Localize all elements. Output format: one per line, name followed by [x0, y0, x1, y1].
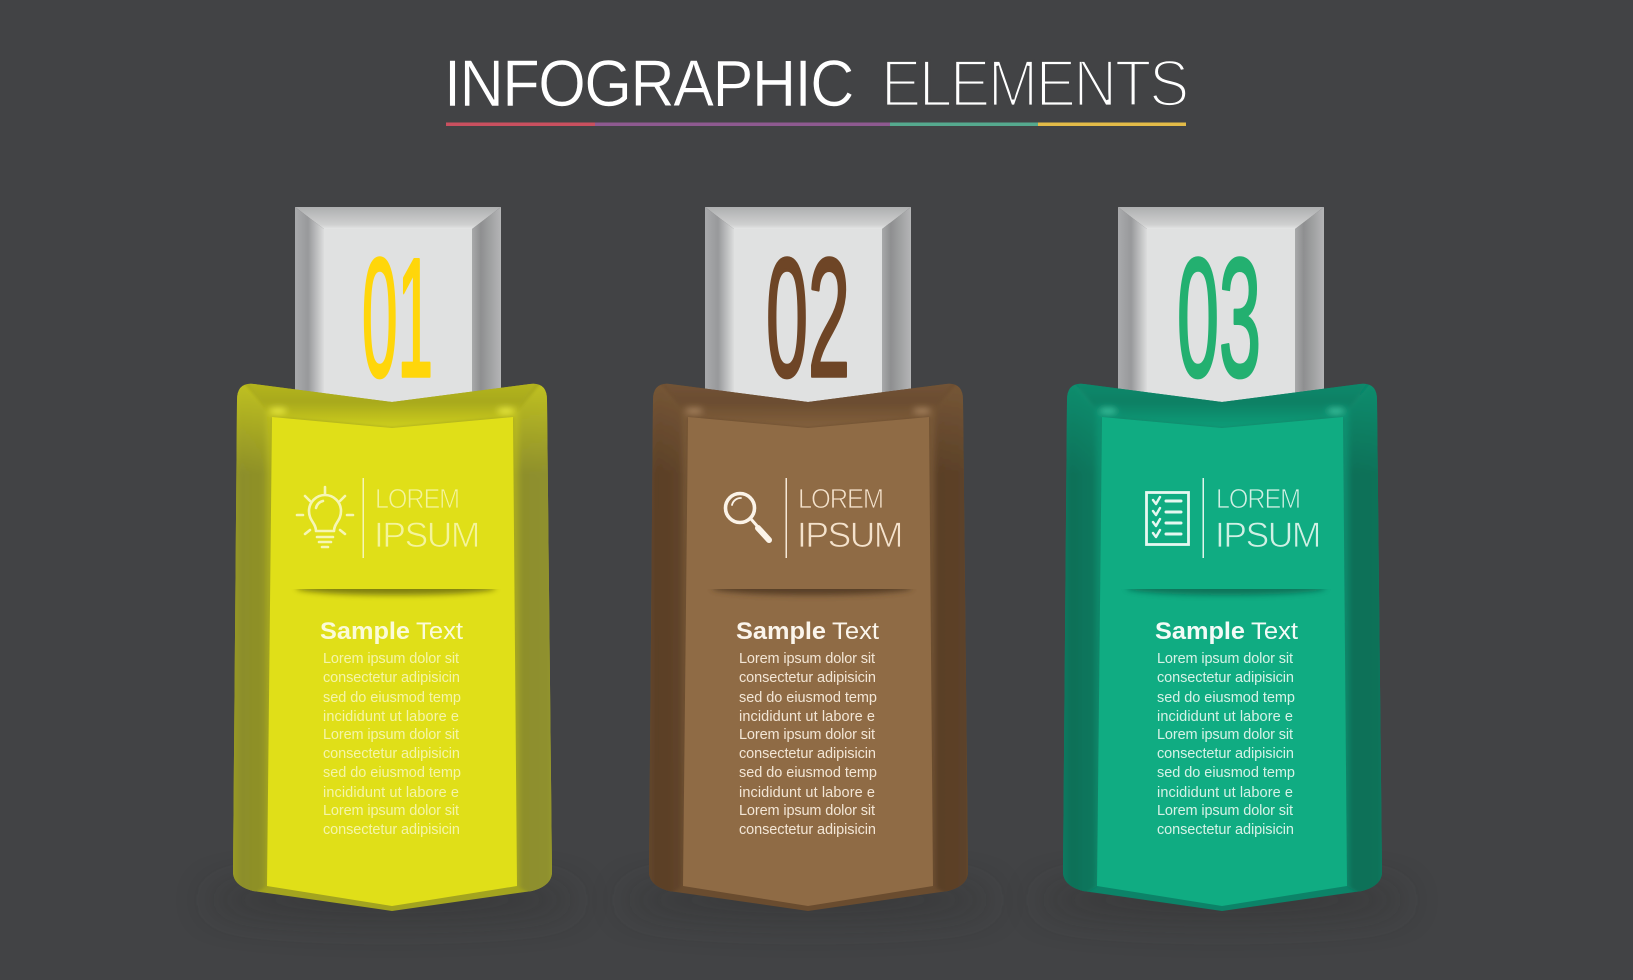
- heading: lorem ipsum: [797, 483, 902, 555]
- body text: Lorem ipsum dolor sit: [1157, 727, 1293, 743]
- body text: Lorem ipsum dolor sit: [323, 651, 459, 667]
- heading: lorem ipsum: LOREM: [375, 483, 459, 514]
- title: INFOGRAPHIC: [444, 46, 853, 120]
- floor shadow: [1037, 882, 1407, 918]
- body text: consectetur adipisicin: [1157, 822, 1294, 838]
- heading: lorem ipsum: IPSUM: [1215, 516, 1320, 555]
- body text: sed do eiusmod temp: [739, 765, 877, 781]
- body text: consectetur adipisicin: [323, 746, 460, 762]
- body text: [739, 651, 877, 838]
- body text: Lorem ipsum dolor sit: [739, 651, 875, 667]
- body text: consectetur adipisicin: [739, 822, 876, 838]
- card body: [225, 376, 560, 911]
- heading: lorem ipsum: LOREM: [798, 483, 883, 514]
- body text: incididunt ut labore e: [323, 709, 459, 725]
- number tab 02: [705, 207, 911, 412]
- sample text heading: [320, 618, 463, 645]
- number tab 03: [1118, 207, 1324, 412]
- body text: consectetur adipisicin: [323, 822, 460, 838]
- floor shadow: [207, 882, 577, 918]
- floor shadow: [623, 882, 993, 918]
- sample text heading: Sample: [736, 618, 826, 645]
- sample text heading: [1155, 618, 1298, 645]
- number tab 01: [295, 207, 501, 412]
- body text: Lorem ipsum dolor sit: [1157, 803, 1293, 819]
- body text: sed do eiusmod temp: [1157, 765, 1295, 781]
- sample text heading: Text: [832, 618, 879, 645]
- number tab 01: 01: [362, 223, 433, 412]
- number tab 03: 03: [1177, 223, 1261, 412]
- body text: consectetur adipisicin: [739, 670, 876, 686]
- sample text heading: Sample: [320, 618, 410, 645]
- sample text heading: Text: [1251, 618, 1298, 645]
- body text: Lorem ipsum dolor sit: [739, 727, 875, 743]
- sample text heading: Sample: [1155, 618, 1245, 645]
- heading: lorem ipsum: [374, 483, 479, 555]
- body text: Lorem ipsum dolor sit: [739, 803, 875, 819]
- heading: lorem ipsum: IPSUM: [374, 516, 479, 555]
- title: [444, 46, 1187, 120]
- heading: lorem ipsum: IPSUM: [797, 516, 902, 555]
- number tab 02: 02: [766, 223, 850, 412]
- body text: consectetur adipisicin: [739, 746, 876, 762]
- body text: incididunt ut labore e: [1157, 785, 1293, 801]
- header divider: [786, 478, 787, 558]
- body text: incididunt ut labore e: [1157, 709, 1293, 725]
- body text: [323, 651, 461, 838]
- body text: incididunt ut labore e: [739, 785, 875, 801]
- card body: [1055, 376, 1390, 911]
- header divider: [1202, 478, 1204, 558]
- body text: consectetur adipisicin: [1157, 746, 1294, 762]
- title underline: [446, 122, 1186, 126]
- heading: lorem ipsum: LOREM: [1216, 483, 1300, 514]
- sample text heading: Text: [416, 618, 463, 645]
- body text: Lorem ipsum dolor sit: [323, 727, 459, 743]
- body text: consectetur adipisicin: [323, 670, 460, 686]
- heading: lorem ipsum: [1215, 483, 1320, 555]
- body text: sed do eiusmod temp: [739, 690, 877, 706]
- title: ELEMENTS: [881, 46, 1187, 120]
- body text: consectetur adipisicin: [1157, 670, 1294, 686]
- body text: Lorem ipsum dolor sit: [1157, 651, 1293, 667]
- icon: magnifying glass: [726, 494, 769, 540]
- body text: sed do eiusmod temp: [323, 690, 461, 706]
- body text: incididunt ut labore e: [739, 709, 875, 725]
- panel: step 2: [623, 207, 993, 918]
- body text: sed do eiusmod temp: [323, 765, 461, 781]
- body text: [1157, 651, 1295, 838]
- body text: incididunt ut labore e: [323, 785, 459, 801]
- body text: Lorem ipsum dolor sit: [323, 803, 459, 819]
- icon: light bulb: [297, 487, 353, 547]
- panel: step 1: [207, 207, 577, 918]
- header divider: [362, 478, 364, 558]
- icon: checklist: [1146, 492, 1188, 544]
- sample text heading: [736, 618, 879, 645]
- panel: step 3: [1063, 207, 1382, 911]
- body text: sed do eiusmod temp: [1157, 690, 1295, 706]
- card body: [641, 376, 976, 911]
